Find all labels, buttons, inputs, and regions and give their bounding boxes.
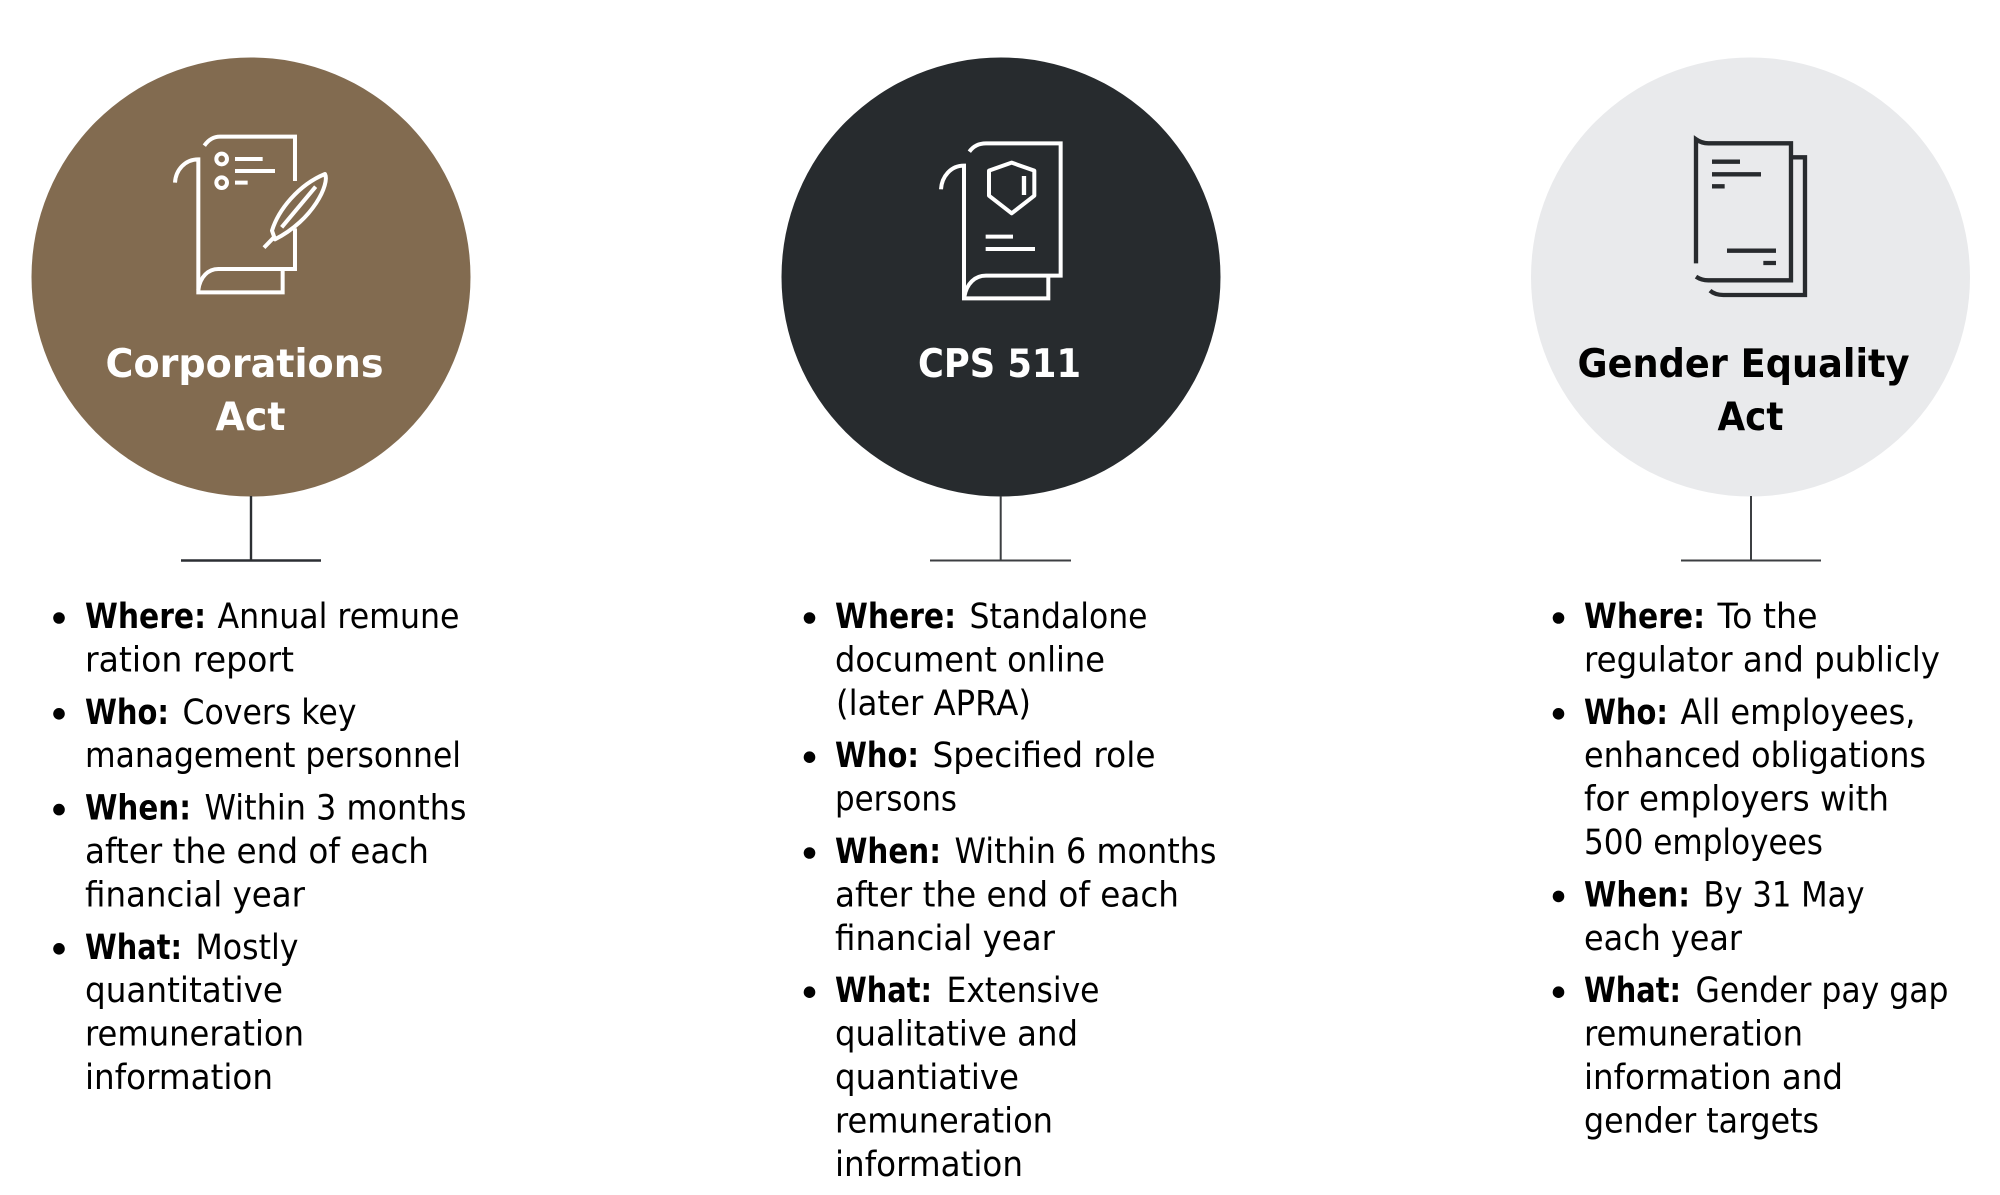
bullet: who: 500 employees — [1584, 823, 1823, 863]
heading: Corporations Act: Act — [216, 395, 286, 440]
connector: stem and bar — [930, 496, 1071, 560]
bullet: who: for employers with — [1584, 780, 1889, 820]
bullet: when: after the end of each — [835, 875, 1179, 915]
circle: CPS 511 — [782, 58, 1220, 496]
bullet: where: Standalone — [970, 597, 1148, 637]
bullet: what: quantitative — [85, 971, 283, 1011]
bullet: who: Covers key — [182, 693, 356, 733]
icon: document with quill — [175, 137, 326, 292]
bullet: what: information and — [1584, 1058, 1843, 1098]
list: CPS 511 details — [804, 597, 1216, 1185]
list: Corporations Act details — [53, 597, 466, 1098]
bullet: who — [53, 693, 461, 776]
bullet: where — [804, 597, 1148, 724]
bullet: what: information — [85, 1058, 273, 1098]
heading: CPS 511: CPS 511 — [918, 342, 1081, 387]
bullet: what: qualitative and — [835, 1015, 1078, 1055]
bullet: what: What: — [835, 971, 932, 1011]
bullet: when: When: — [1584, 875, 1690, 915]
bullet: when: When: — [835, 832, 941, 872]
bullet: who: Who: — [1584, 693, 1668, 733]
bullet: what — [53, 928, 304, 1098]
bullet: where — [1553, 597, 1940, 680]
icon: stacked documents — [1696, 139, 1805, 295]
bullet: who: Who: — [85, 693, 169, 733]
connector: stem and bar — [1681, 496, 1821, 560]
icon: document with shield — [941, 143, 1061, 298]
bullet: who — [804, 736, 1156, 820]
bullet: who: management personnel — [85, 736, 461, 776]
heading: Corporations Act: Corporations — [106, 342, 384, 387]
bullet: what: quantiative — [835, 1058, 1019, 1098]
bullet: who: Who: — [835, 736, 919, 776]
bullet: what — [1553, 971, 1948, 1141]
panel: Gender Equality Act — [1531, 58, 1970, 1141]
bullet: when — [1553, 875, 1864, 959]
bullet: where: Where: — [85, 597, 206, 637]
bullet: when: By 31 May — [1704, 875, 1864, 915]
bullet: when: financial year — [85, 875, 306, 915]
bullet: what: Gender pay gap — [1696, 971, 1948, 1011]
bullet: what: Extensive — [946, 971, 1100, 1011]
bullet: who: All employees, — [1680, 693, 1916, 733]
bullet: what: Mostly — [196, 928, 298, 968]
bullet: when: each year — [1584, 919, 1743, 959]
bullet: when: financial year — [835, 919, 1056, 959]
bullet: when: When: — [85, 789, 191, 829]
circle: Gender Equality Act — [1531, 58, 1970, 496]
bullet: who: enhanced obligations — [1584, 736, 1926, 776]
connector: stem and bar — [181, 496, 321, 560]
bullet: what: remuneration — [85, 1015, 304, 1055]
heading: Corporations Act — [106, 342, 384, 440]
panel: CPS 511 — [782, 58, 1220, 1185]
bullet: when: Within 3 months — [204, 789, 466, 829]
bullet: when — [53, 789, 466, 915]
bullet: where: Annual remune — [218, 597, 460, 637]
list: Gender Equality Act details — [1553, 597, 1948, 1141]
bullet: what: information — [835, 1145, 1023, 1185]
bullet: where: ration report — [85, 640, 294, 680]
bullet: who: persons — [835, 780, 957, 820]
bullet: what: remuneration — [1584, 1015, 1803, 1055]
bullet: when: Within 6 months — [954, 832, 1216, 872]
bullet: what: What: — [1584, 971, 1681, 1011]
bullet: when: after the end of each — [85, 832, 429, 872]
bullet: who: Specified role — [932, 736, 1156, 776]
bullet: what: gender targets — [1584, 1101, 1819, 1141]
bullet: where: Where: — [835, 597, 956, 637]
bullet: what — [804, 971, 1100, 1185]
panel: Corporations Act — [32, 58, 470, 1098]
heading: Gender Equality Act: Gender Equality — [1578, 342, 1910, 387]
circle: Corporations Act — [32, 58, 470, 496]
bullet: what: remuneration — [835, 1101, 1053, 1141]
bullet: where: document online — [835, 640, 1105, 680]
bullet: where: Where: — [1584, 597, 1705, 637]
bullet: where: To the — [1717, 597, 1818, 637]
bullet: where: regulator and publicly — [1584, 640, 1940, 680]
bullet: where: (later APRA) — [836, 684, 1031, 724]
heading: Gender Equality Act — [1578, 342, 1910, 440]
bullet: what: What: — [85, 928, 182, 968]
bullet: who — [1553, 693, 1926, 863]
bullet: when — [804, 832, 1216, 959]
bullet: where — [53, 597, 459, 680]
heading: Gender Equality Act: Act — [1718, 395, 1784, 440]
